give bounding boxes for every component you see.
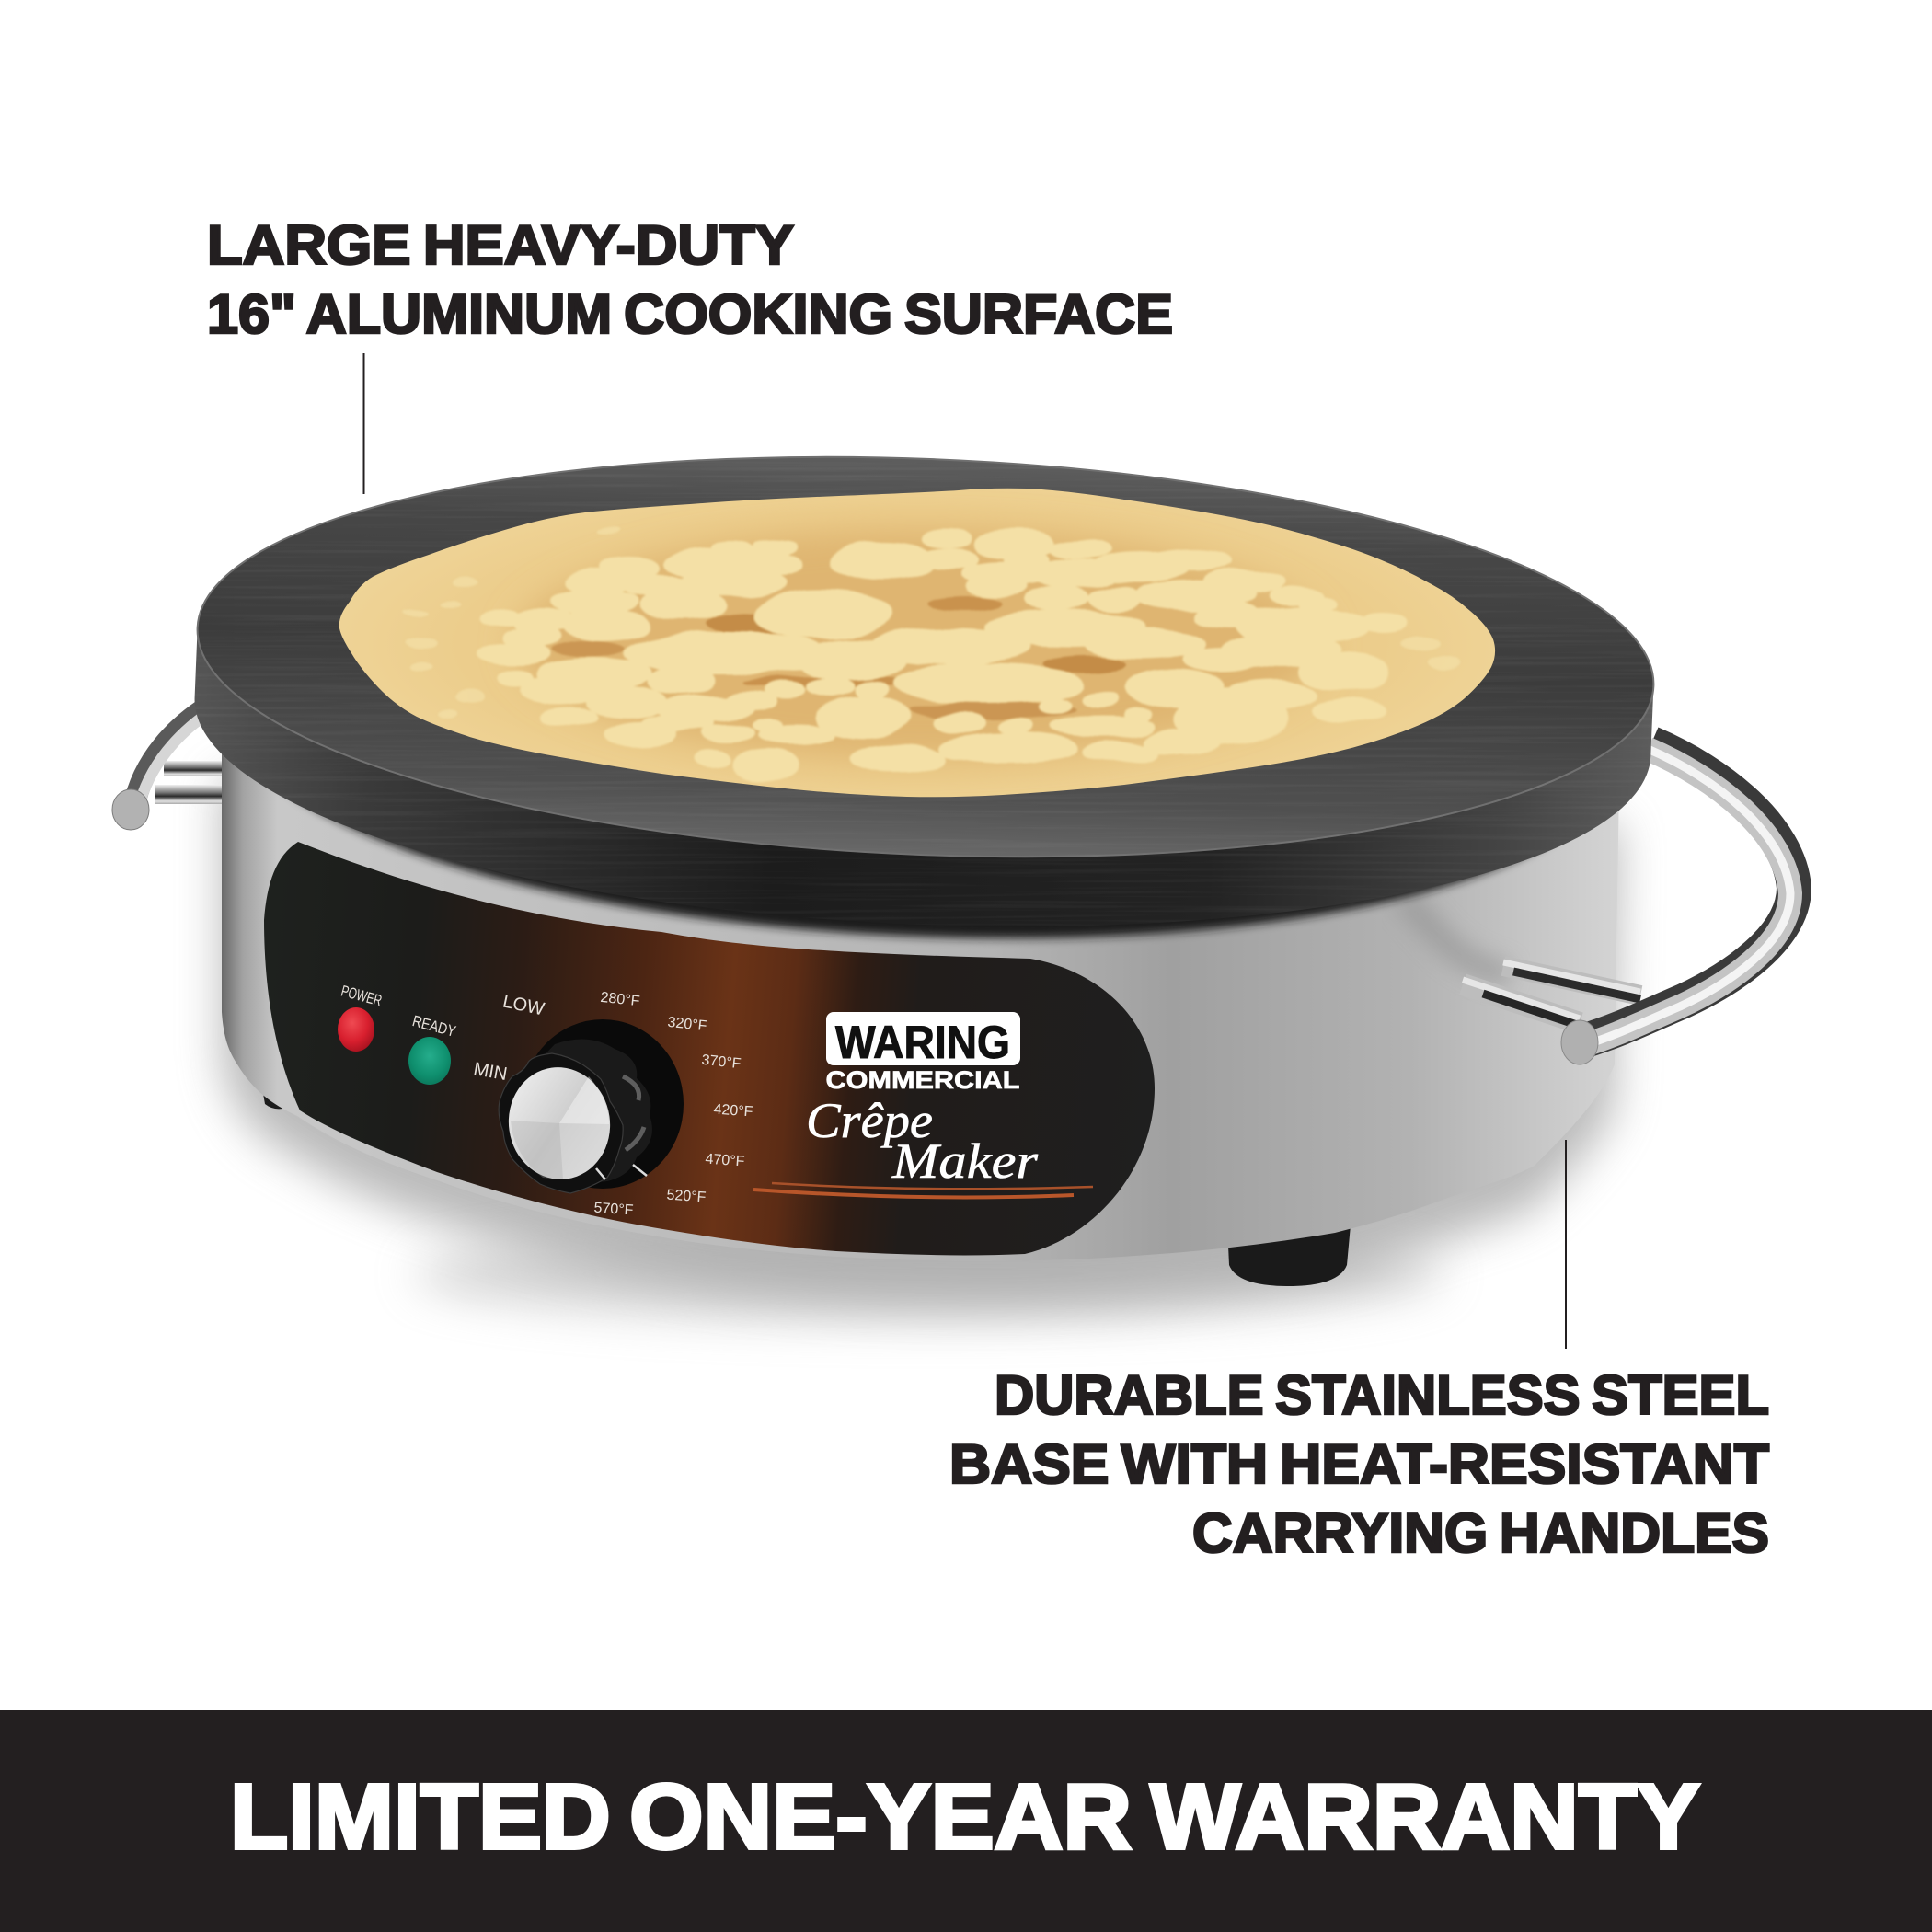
heading: cooking surface: LARGE HEAVY-DUTY xyxy=(207,214,794,276)
heading: stainless base: DURABLE STAINLESS STEEL xyxy=(995,1364,1769,1426)
brushed metal texture xyxy=(265,477,1520,910)
indicator: power light xyxy=(338,982,384,1052)
indicator: ready light xyxy=(408,1012,458,1085)
leader line: stainless base xyxy=(1565,1140,1567,1349)
brand logo xyxy=(826,1012,1020,1094)
temperature scale labels: LOW xyxy=(500,992,546,1020)
griddle top surface xyxy=(190,430,1662,884)
product name xyxy=(806,1093,1039,1189)
griddle plate xyxy=(187,430,1662,964)
heading: cooking surface: 16" ALUMINUM COOKING SURFACE xyxy=(207,283,1173,345)
crepe maker product xyxy=(112,430,1794,1320)
heading: stainless base xyxy=(949,1364,1769,1564)
temperature scale labels: 520°F xyxy=(666,1188,707,1205)
indicator: ready light: READY xyxy=(410,1012,458,1041)
browned patches xyxy=(552,595,1126,719)
handle recess on base xyxy=(1403,897,1509,975)
pale outer blisters xyxy=(404,527,1461,718)
temperature scale labels: 470°F xyxy=(705,1152,745,1169)
control panel xyxy=(264,842,1155,1255)
leader line: cooking surface xyxy=(362,353,364,494)
temperature scale labels: 320°F xyxy=(667,1015,707,1034)
feet xyxy=(259,1067,1352,1286)
left handle xyxy=(112,707,224,830)
heading: cooking surface xyxy=(207,214,1173,345)
temperature dial xyxy=(499,1019,684,1193)
right handle xyxy=(1463,743,1794,1064)
brand logo: COMMERCIAL xyxy=(826,1066,1019,1094)
pale lace cells xyxy=(482,532,1402,779)
orange accent lines xyxy=(753,1183,1093,1197)
temperature scale labels: 370°F xyxy=(701,1052,742,1072)
floor shadow xyxy=(222,777,1619,1320)
product name: Crêpe xyxy=(806,1093,933,1148)
temperature scale labels: MIN xyxy=(472,1059,509,1085)
stainless steel base xyxy=(222,736,1619,1261)
griddle side wall xyxy=(187,627,1653,953)
temperature scale labels xyxy=(472,990,753,1218)
heading: stainless base: BASE WITH HEAT-RESISTANT xyxy=(949,1433,1769,1495)
temperature scale labels: 280°F xyxy=(600,990,640,1009)
crepe xyxy=(339,488,1496,797)
product name: Maker xyxy=(891,1133,1039,1189)
brand logo: WARING xyxy=(835,1017,1010,1068)
heading: stainless base: CARRYING HANDLES xyxy=(1192,1502,1769,1564)
temperature scale labels: 570°F xyxy=(593,1201,634,1218)
warranty banner: LIMITED ONE-YEAR WARRANTY xyxy=(230,1765,1700,1869)
temperature scale labels: 420°F xyxy=(713,1102,753,1120)
warranty banner xyxy=(0,1710,1932,1932)
shadow gap below griddle xyxy=(229,515,1615,964)
indicator: power light: POWER xyxy=(339,982,384,1009)
golden toasted zone xyxy=(515,529,1325,759)
